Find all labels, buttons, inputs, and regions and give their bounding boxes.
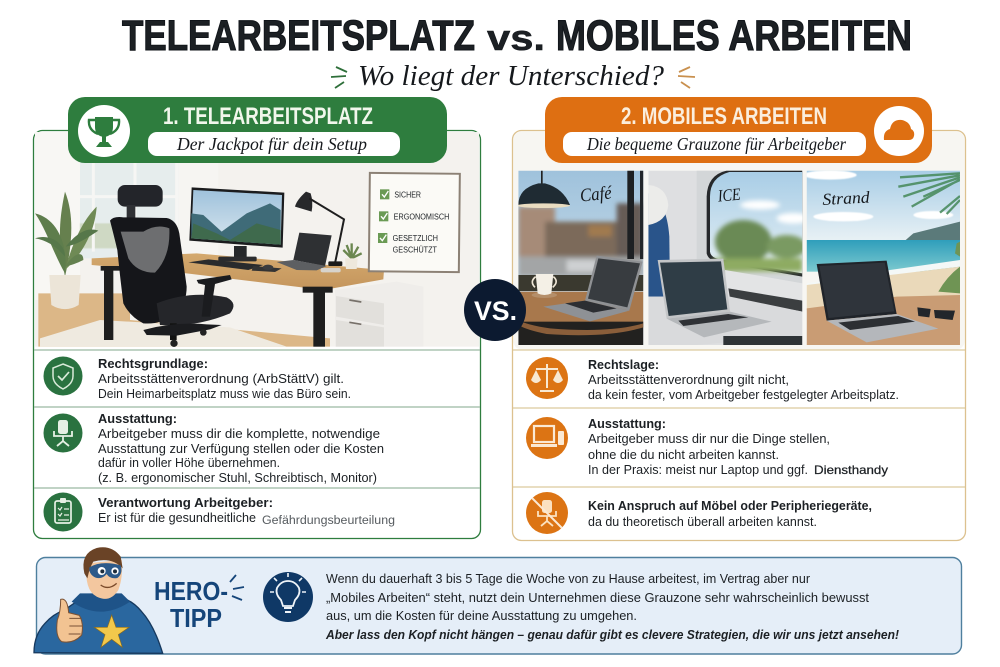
- office chair: [110, 185, 233, 347]
- wall checklist poster: [369, 173, 460, 272]
- photos: Café, ICE, Strand: [517, 170, 960, 345]
- row: Rechtsgrundlage: Rechtsgrundlage:: [98, 356, 208, 371]
- row: Rechtslage: da kein fester, vom Arbeitgeber festgelegter Arbeitsplatz.: [588, 388, 899, 402]
- monitor: [189, 187, 284, 261]
- title: TELEARBEITSPLATZ: [122, 12, 475, 60]
- small plant: [321, 243, 362, 272]
- header banner: Telearbeitsplatz: Der Jackpot für dein Setup: [176, 134, 367, 154]
- row: Kein Anspruch: [526, 492, 872, 534]
- icon: cloud: [874, 106, 924, 156]
- row: Rechtslage: Arbeitsstättenverordnung gilt nicht,: [588, 373, 789, 387]
- VS badge: [464, 279, 526, 341]
- plant: [35, 192, 98, 309]
- photo: ICE: ICE: [716, 185, 742, 206]
- illustration: superhero with thumbs up: [34, 547, 163, 653]
- tip text: Aber lass den Kopf nicht hängen – genau dafür gibt es clevere Strategien, die wir uns jetzt ansehen!: [325, 627, 900, 642]
- Hero-Tipp heading: [154, 575, 244, 633]
- header banner: Mobiles Arbeiten: 2. MOBILES ARBEITEN: [621, 103, 827, 130]
- photo: ICE: [648, 171, 810, 345]
- keyboard and mouse: [188, 259, 282, 272]
- photo: Strand: [803, 170, 960, 345]
- row: Rechtslage: [526, 357, 899, 402]
- row: Ausstattung: Ausstattung:: [98, 411, 177, 426]
- VS badge: VS.: [474, 296, 517, 326]
- header banner: Mobiles Arbeiten: Die bequeme Grauzone für Arbeitgeber: [586, 134, 847, 154]
- wall checklist poster: SICHER: [394, 189, 421, 199]
- row: Ausstattung: Diensthandy: [814, 463, 888, 477]
- row: Ausstattung: ohne die du nicht arbeiten kannst.: [588, 447, 779, 462]
- photo: Café: [517, 171, 643, 345]
- title: vs.: [487, 17, 545, 58]
- photo: Café: Café: [579, 182, 613, 207]
- tip text: [325, 571, 900, 642]
- row: Ausstattung: [44, 411, 384, 485]
- wall checklist poster: ERGONOMISCH: [394, 211, 449, 221]
- photo: home office setup: [30, 130, 490, 347]
- wall checklist poster: GESCHÜTZT: [393, 245, 437, 255]
- icon: light bulb: [263, 572, 313, 622]
- row: Kein Anspruch: da du theoretisch überall arbeiten kannst.: [588, 514, 817, 529]
- row: Ausstattung: Arbeitgeber muss dir die komplette, notwendige: [98, 426, 380, 441]
- title: [122, 12, 912, 60]
- Hero-Tipp heading: HERO-: [154, 576, 228, 606]
- panel: Hero-Tipp: [34, 547, 962, 654]
- row: Kein Anspruch: Kein Anspruch auf Möbel oder Peripheriegeräte,: [588, 498, 872, 513]
- icon: trophy: [78, 105, 130, 157]
- title: MOBILES ARBEITEN: [556, 12, 912, 60]
- desk: [92, 253, 384, 347]
- row: Rechtsgrundlage: Arbeitsstättenverordnung (ArbStättV) gilt.: [98, 371, 344, 386]
- tip text: aus, um die Kosten für deine Ausstattung zu umgehen.: [326, 608, 637, 623]
- desk lamp: [295, 192, 344, 266]
- header banner: Mobiles Arbeiten: [545, 97, 932, 163]
- row: Ausstattung: Ausstattung zur Verfügung stellen oder die Kosten: [98, 441, 384, 456]
- laptop on desk: [277, 233, 332, 270]
- subtitle: Wo liegt der Unterschied?: [358, 61, 664, 92]
- header banner: Telearbeitsplatz: [68, 97, 447, 163]
- row: Verantwortung Arbeitgeber: Gefährdungsbeurteilung: [262, 515, 395, 527]
- panel: Mobiles Arbeiten: [512, 97, 966, 540]
- row: Ausstattung: Ausstattung:: [588, 416, 666, 431]
- cabinet: [336, 296, 384, 347]
- row: Verantwortung Arbeitgeber: Verantwortung Arbeitgeber:: [98, 495, 273, 510]
- row: Rechtslage: Rechtslage:: [588, 357, 659, 372]
- wall checklist poster: GESETZLICH: [393, 233, 438, 243]
- row: Rechtsgrundlage: Dein Heimarbeitsplatz muss wie das Büro sein.: [98, 387, 351, 401]
- tip text: „Mobiles Arbeiten“ steht, nutzt dein Unternehmen diese Grauzone sehr wahrscheinlich bewusst: [326, 590, 869, 605]
- row: Ausstattung: dafür in voller Höhe übernehmen.: [98, 455, 280, 470]
- photo: Strand: Strand: [822, 188, 871, 209]
- row: Ausstattung: [526, 416, 888, 477]
- header banner: Telearbeitsplatz: 1. TELEARBEITSPLATZ: [163, 103, 373, 130]
- panel: Telearbeitsplatz: [30, 97, 490, 538]
- row: Ausstattung: Arbeitgeber muss dir nur die Dinge stellen,: [588, 431, 830, 446]
- row: Rechtsgrundlage: [44, 356, 351, 401]
- Hero-Tipp heading: TIPP: [170, 603, 222, 633]
- tip text: Wenn du dauerhaft 3 bis 5 Tage die Woche von zu Hause arbeitest, im Vertrag aber nur: [326, 571, 811, 586]
- row: Verantwortung Arbeitgeber: Er ist für die gesundheitliche: [98, 510, 256, 525]
- row: Ausstattung: (z. B. ergonomischer Stuhl, Schreibtisch, Monitor): [98, 470, 377, 485]
- row: Ausstattung: In der Praxis: meist nur Laptop und ggf.: [588, 462, 808, 477]
- row: Verantwortung Arbeitgeber: [44, 492, 395, 532]
